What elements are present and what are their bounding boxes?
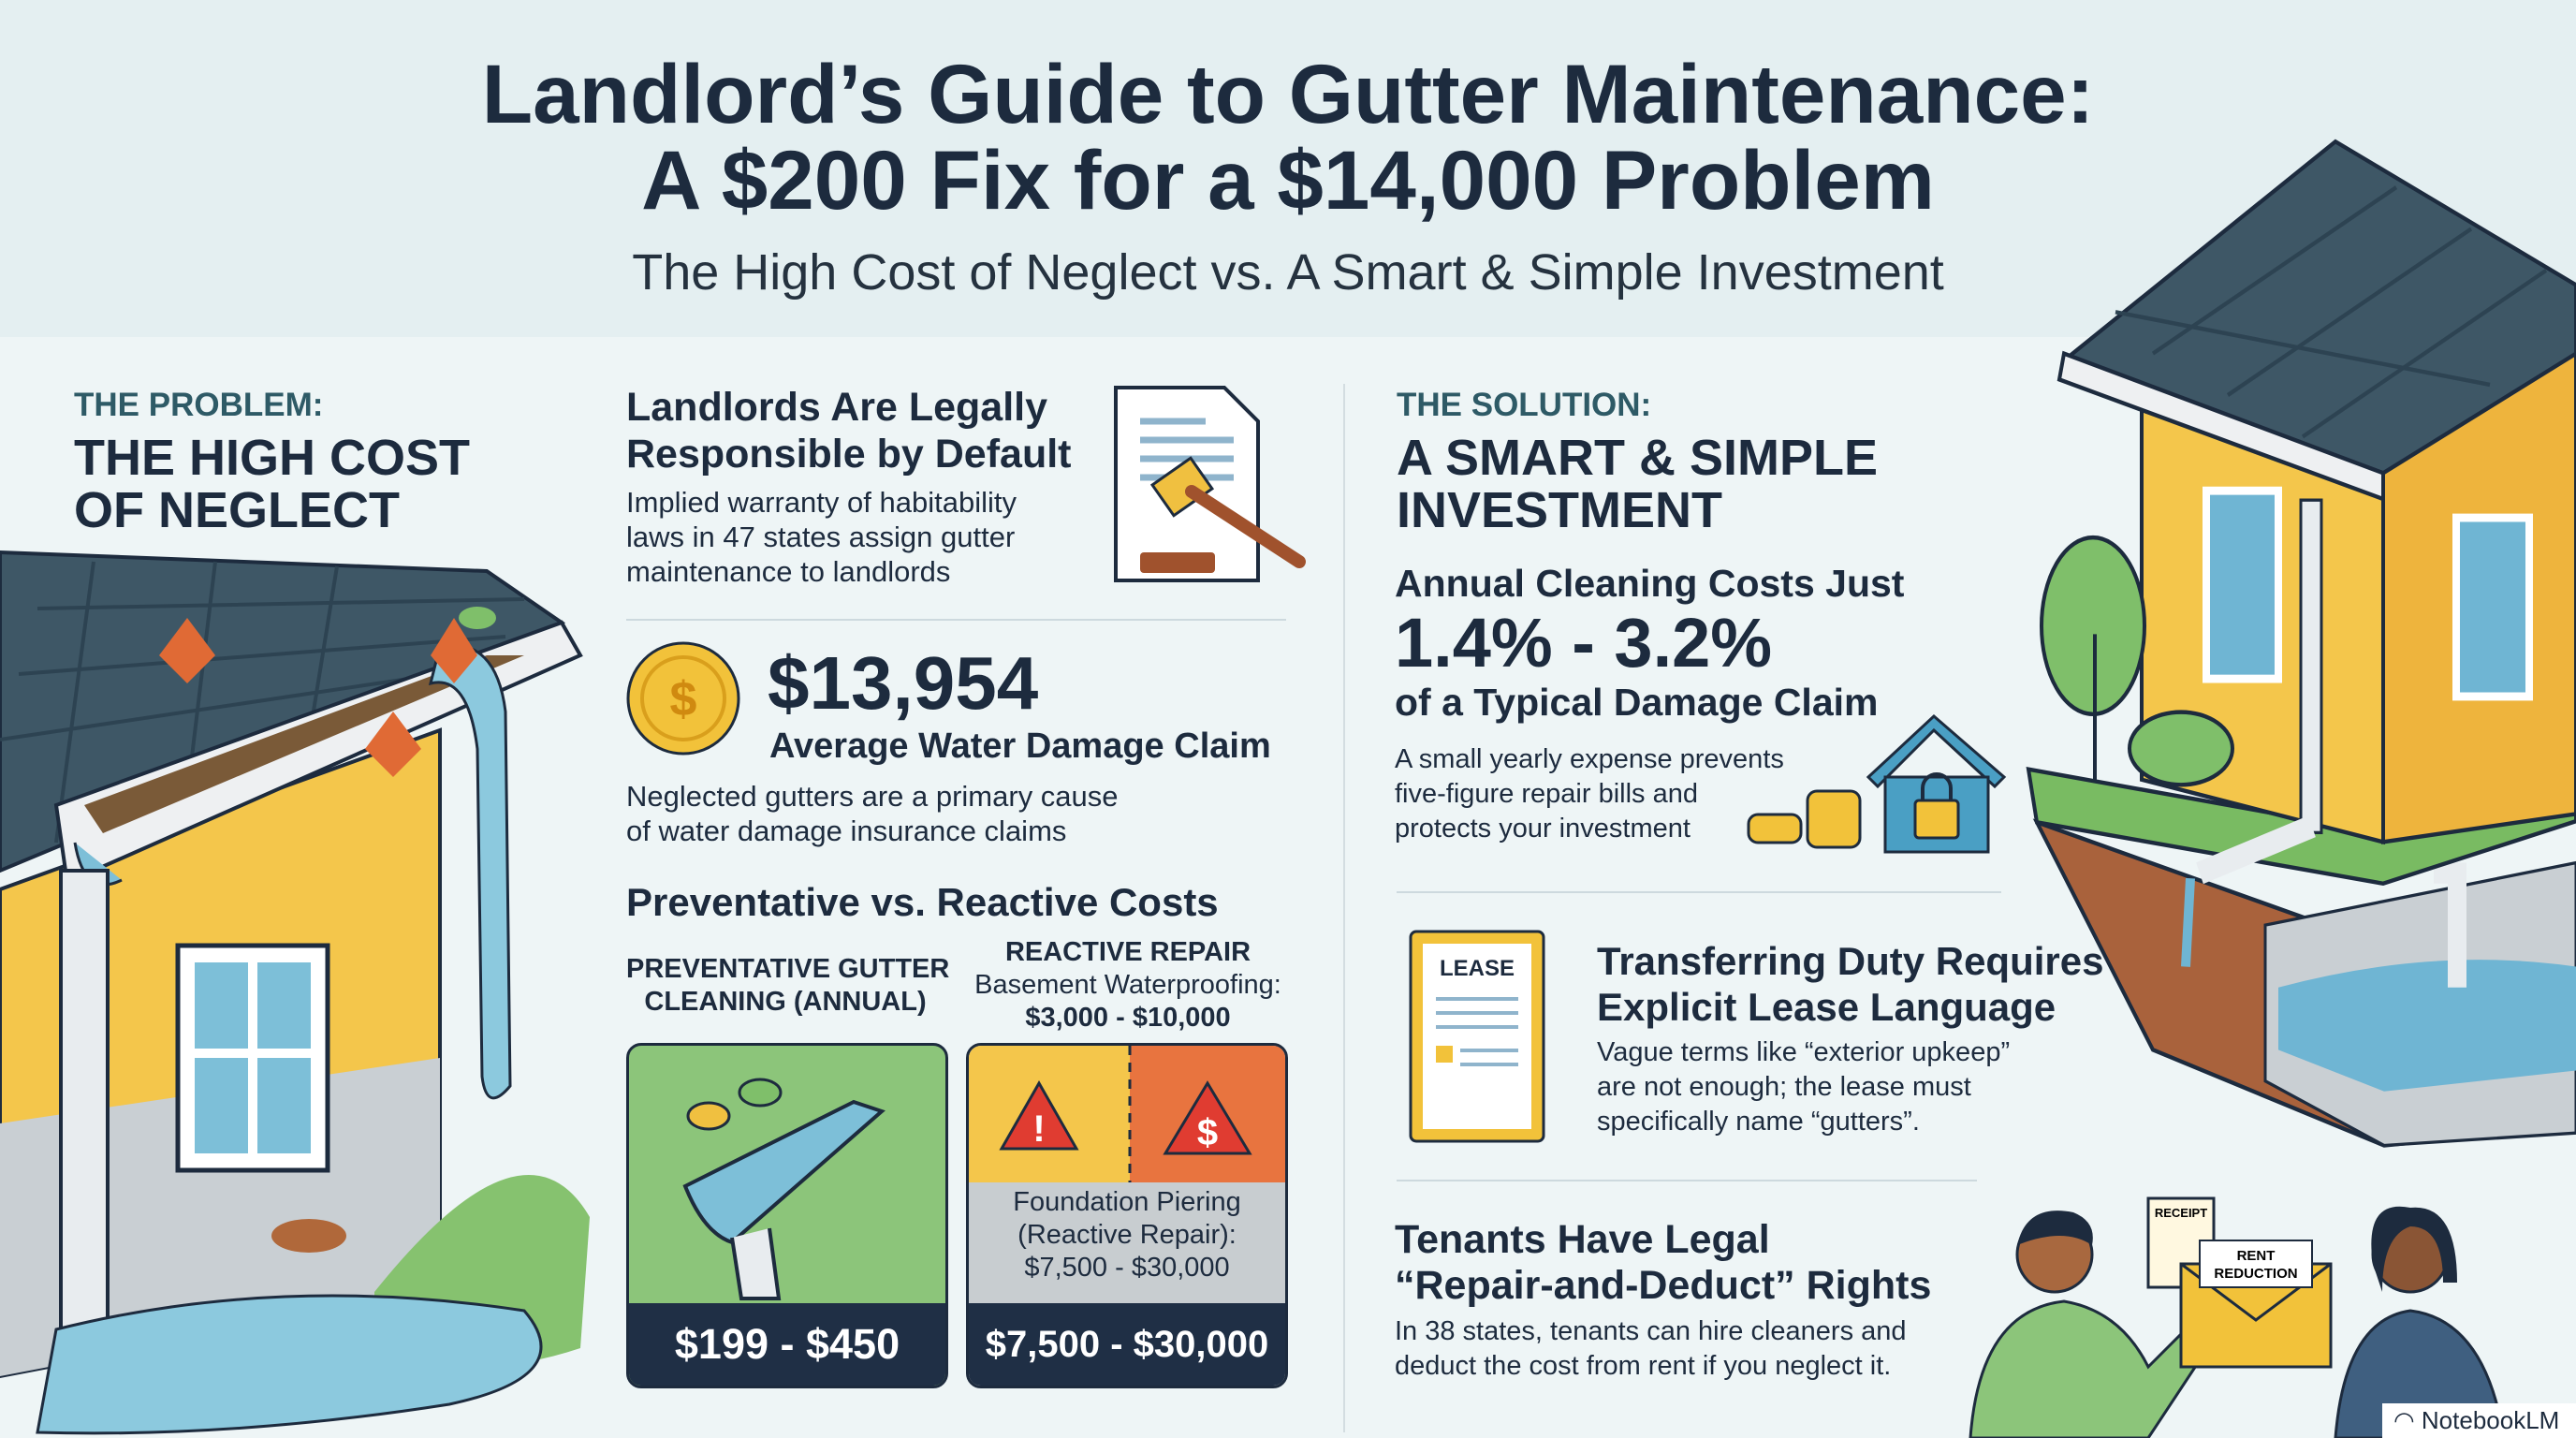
text block: small expense: A small yearly expense prevents <box>1395 744 1784 774</box>
stat: cleaning percentage: 1.4% - 3.2% <box>1395 604 1772 682</box>
text block: lease language: are not enough; the lease must <box>1597 1072 1971 1102</box>
header band <box>0 0 2576 337</box>
text block: small expense <box>1395 744 1784 844</box>
label: reactive: Basement Waterproofing: <box>974 970 1281 1000</box>
stat: cleaning percentage <box>1395 562 1904 724</box>
illustration: tenant and landlord: RENT <box>2237 1248 2275 1264</box>
text block: legal responsibility: maintenance to landlords <box>626 555 950 588</box>
label: reactive <box>974 937 1281 1033</box>
text block: tenant rights: “Repair-and-Deduct” Rights <box>1395 1263 1931 1308</box>
stat: cleaning percentage: Annual Cleaning Costs Just <box>1395 562 1904 605</box>
text block: lease language: Explicit Lease Language <box>1597 985 2056 1029</box>
heading: the solution: INVESTMENT <box>1397 482 1722 538</box>
text block: claim note: of water damage insurance claims <box>626 814 1066 847</box>
card: preventative <box>626 1043 948 1388</box>
heading: the problem <box>74 387 470 538</box>
divider <box>1397 1180 1977 1181</box>
card: preventative: $199 - $450 <box>675 1320 900 1368</box>
label: reactive: $3,000 - $10,000 <box>1025 1003 1231 1033</box>
label: preventative: CLEANING (ANNUAL) <box>644 987 927 1017</box>
heading: the solution: THE SOLUTION: <box>1397 387 1651 423</box>
illustration: tenant and landlord <box>1969 1196 2498 1438</box>
card: reactive: ! <box>1032 1108 1046 1150</box>
text block: tenant rights <box>1395 1217 1931 1381</box>
title <box>482 47 2094 227</box>
icon: coin: $ <box>670 672 697 726</box>
text block: small expense: protects your investment <box>1395 814 1690 844</box>
card: reactive: (Reactive Repair): <box>1017 1220 1237 1250</box>
text block: claim note: Neglected gutters are a primary cause <box>626 780 1119 813</box>
divider <box>1397 891 2001 893</box>
text block: small expense: five-figure repair bills and <box>1395 779 1698 809</box>
text block: legal responsibility <box>626 385 1071 588</box>
text block: tenant rights: In 38 states, tenants can hire cleaners and <box>1395 1316 1907 1346</box>
text block: legal responsibility: Landlords Are Legally <box>626 385 1047 430</box>
icon: lease document: LEASE <box>1440 956 1515 981</box>
icon: document with gavel <box>1114 386 1306 582</box>
text block: lease language <box>1597 939 2103 1137</box>
heading: the solution <box>1397 387 1878 538</box>
heading: costs comparison: Preventative vs. Reactive Costs <box>626 880 1219 924</box>
text: Average Water Damage Claim <box>769 726 1271 766</box>
heading: the solution: A SMART & SIMPLE <box>1397 430 1878 486</box>
divider <box>626 619 1286 621</box>
heading: the problem: THE PROBLEM: <box>74 387 323 423</box>
title: Landlord’s Guide to Gutter Maintenance: <box>482 47 2094 140</box>
illustration: tenant and landlord: RECEIPT <box>2155 1206 2207 1220</box>
label: preventative: PREVENTATIVE GUTTER <box>626 954 949 984</box>
card: reactive: Foundation Piering <box>1013 1187 1241 1217</box>
badge: NotebookLM: ◠ NotebookLM <box>2393 1406 2559 1434</box>
text block: lease language: specifically name “gutters”. <box>1597 1107 1920 1137</box>
heading: the problem: THE HIGH COST <box>74 430 470 486</box>
text block: legal responsibility: Responsible by Default <box>626 432 1071 477</box>
text block: legal responsibility: laws in 47 states assign gutter <box>626 521 1015 553</box>
illustration: healthy house with basement <box>2028 141 2576 1145</box>
icon: coins and locked house <box>1747 714 2007 854</box>
card: reactive: $7,500 - $30,000 <box>1024 1253 1230 1283</box>
text block: legal responsibility: Implied warranty of habitability <box>626 486 1017 519</box>
icon: coin <box>627 642 739 755</box>
label: reactive: REACTIVE REPAIR <box>1005 937 1251 967</box>
card: reactive: $7,500 - $30,000 <box>986 1324 1268 1365</box>
icon: lease document <box>1410 931 1544 1142</box>
illustration: tenant and landlord: REDUCTION <box>2214 1266 2298 1282</box>
stat: average claim: $13,954 <box>768 641 1038 725</box>
subtitle: The High Cost of Neglect vs. A Smart & Simple Investment <box>632 244 1944 301</box>
divider vertical <box>1343 384 1345 1432</box>
card: reactive <box>966 1043 1288 1388</box>
card: reactive: $ <box>1197 1112 1218 1153</box>
title: A $200 Fix for a $14,000 Problem <box>641 133 1935 227</box>
text block: lease language: Transferring Duty Requires <box>1597 939 2103 983</box>
text block: tenant rights: deduct the cost from rent if you neglect it. <box>1395 1351 1891 1381</box>
stat: cleaning percentage: of a Typical Damage Claim <box>1395 681 1878 724</box>
text block: tenant rights: Tenants Have Legal <box>1395 1217 1770 1262</box>
heading: the problem: OF NEGLECT <box>74 482 400 538</box>
illustration: clogged gutter house <box>0 552 590 1433</box>
text block: claim note <box>626 780 1119 847</box>
label: preventative <box>626 954 949 1017</box>
badge: NotebookLM <box>2382 1403 2576 1438</box>
text block: lease language: Vague terms like “exterior upkeep” <box>1597 1037 2010 1067</box>
